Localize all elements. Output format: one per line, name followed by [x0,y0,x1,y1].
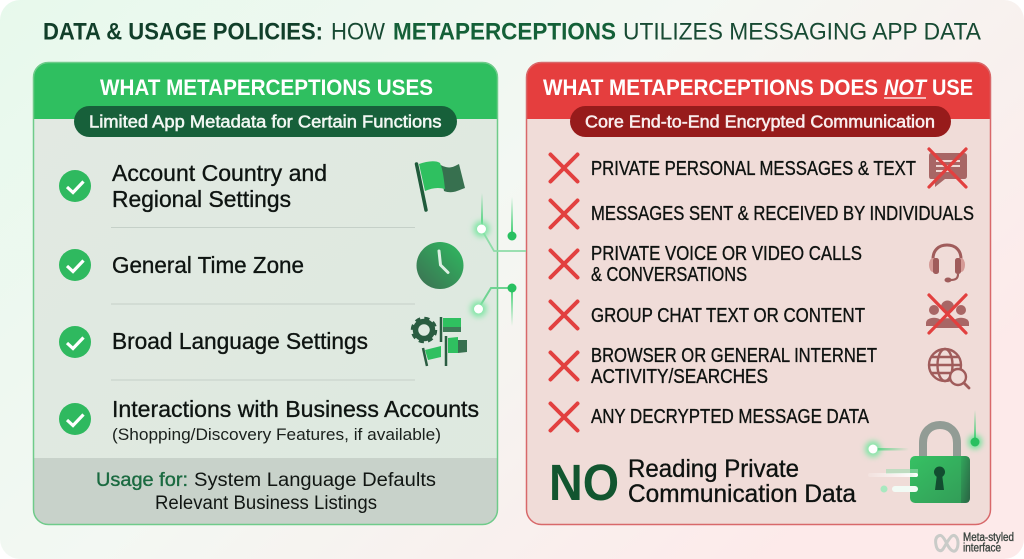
item: account country and regional settings [59,160,327,212]
item: general time zone [59,249,304,281]
icon: padlock [865,410,982,503]
usage footer [96,470,436,514]
icon: gear and flags [412,317,467,366]
item: browser or internet activity: BROWSER OR GENERAL INTERNET [591,345,877,367]
callout: no reading private communication data: NO [549,454,619,511]
callout: no reading private communication data [549,454,856,511]
title: HOW [331,18,385,46]
item: any decrypted message data: ANY DECRYPTED MESSAGE DATA [591,406,870,428]
panel: what MetaPerceptions does not use [526,62,991,525]
item: browser or internet activity [550,345,877,388]
item: any decrypted message data [550,404,870,430]
panel: what MetaPerceptions uses [33,62,498,525]
item: account country and regional settings: Account Country and [112,160,327,186]
item: interactions with business accounts [59,396,479,444]
right panel heading: USE [932,75,973,100]
item: broad language settings [59,326,368,358]
item: account country and regional settings: Regional Settings [112,186,291,212]
item: group chat: GROUP CHAT TEXT OR CONTENT [591,305,865,327]
icon: globe with magnifier [929,349,969,388]
item: broad language settings: Broad Language Settings [112,328,368,354]
left subtitle pill: Limited App Metadata for Certain Functions [89,111,442,131]
icon: clock [416,242,464,289]
title [43,18,981,46]
item: general time zone: General Time Zone [112,252,304,278]
right subtitle pill: Core End-to-End Encrypted Communication [585,111,935,131]
title: UTILIZES MESSAGING APP DATA [623,18,981,46]
usage footer: System Language Defaults [194,470,436,491]
circuit connectors between panels [470,193,526,326]
right subtitle pill [570,106,951,137]
title: DATA & USAGE POLICIES: [43,18,323,46]
callout: no reading private communication data: Reading Private [628,455,799,483]
icon: headset [929,245,965,282]
item: private voice or video calls: & CONVERSATIONS [591,264,747,286]
title: METAPERCEPTIONS [393,18,616,46]
usage footer: Relevant Business Listings [155,493,377,514]
watermark: meta-styled interface: Meta-styled [963,532,1014,544]
callout: no reading private communication data: Communication Data [628,480,856,508]
right panel heading: WHAT METAPERCEPTIONS DOES [543,75,878,100]
watermark: meta-styled interface: interface [963,542,1001,554]
left subtitle pill [74,106,457,137]
item: private personal messages [550,154,916,182]
icon: crossed message [929,149,967,187]
icon: crossed group [926,295,969,333]
watermark: meta-styled interface [936,532,1014,554]
icon: flag [416,161,465,210]
item: group chat [550,302,865,328]
usage footer: Usage for: [96,470,188,491]
item: interactions with business accounts: Interactions with Business Accounts [112,396,479,422]
item: browser or internet activity: ACTIVITY/SEARCHES [591,366,768,388]
right panel heading: NOT [884,75,927,100]
item: messages sent and received [550,200,974,228]
item: private voice or video calls: PRIVATE VOICE OR VIDEO CALLS [591,243,862,265]
item: interactions with business accounts: (Shopping/Discovery Features, if available) [112,425,441,444]
item: private voice or video calls [550,243,862,286]
left panel heading: WHAT METAPERCEPTIONS USES [100,75,433,100]
item: private personal messages: PRIVATE PERSONAL MESSAGES & TEXT [591,158,916,180]
